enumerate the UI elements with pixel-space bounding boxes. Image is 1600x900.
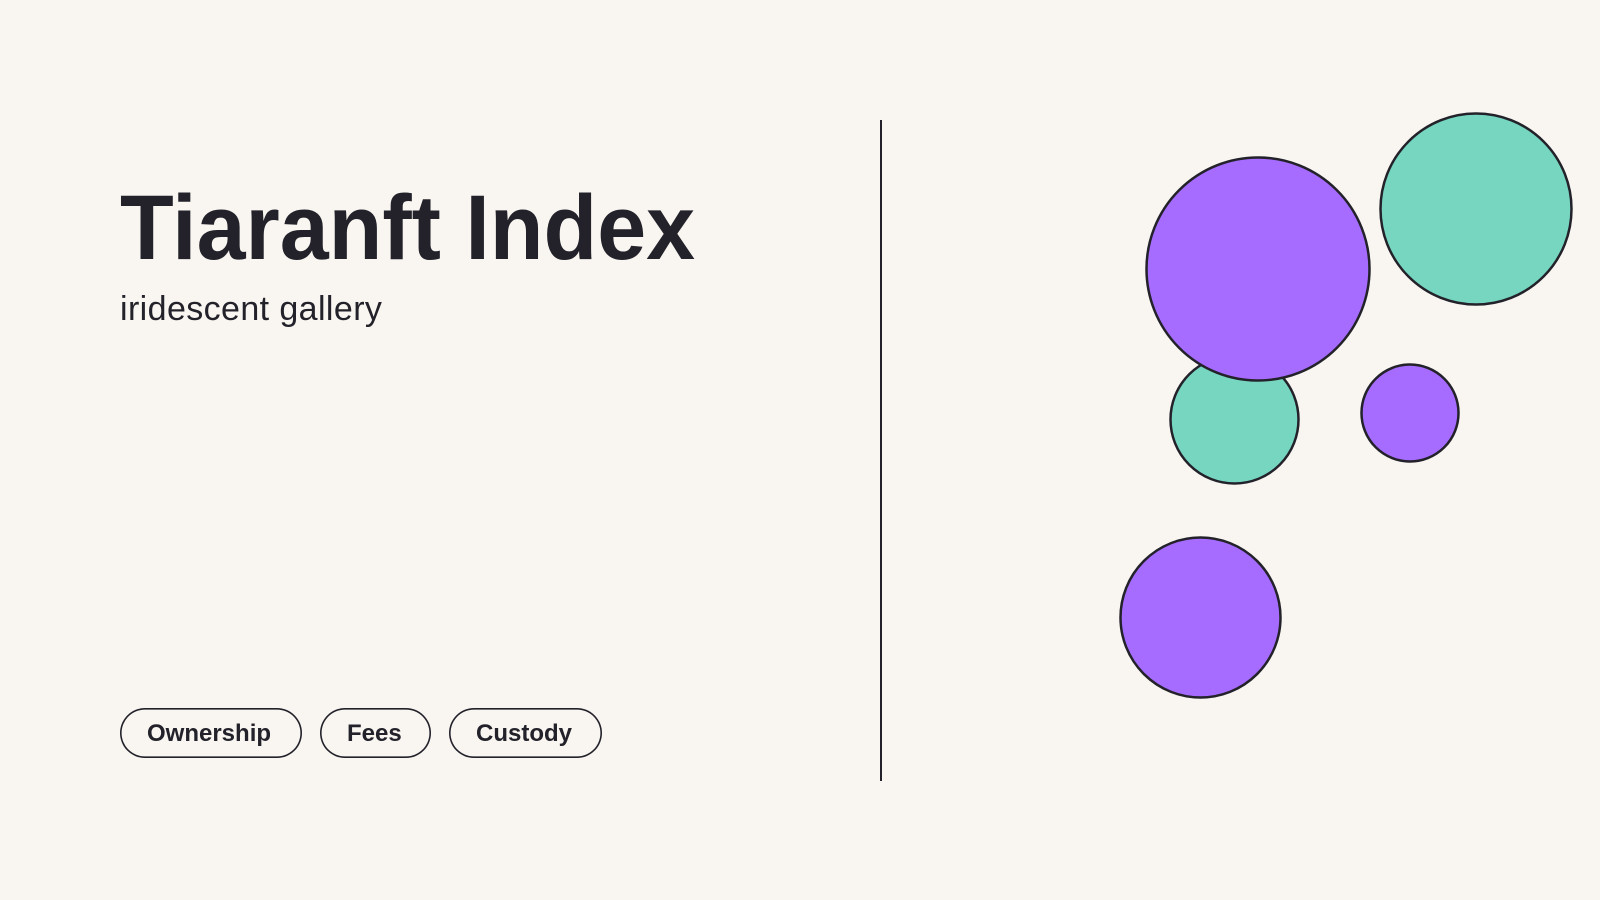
pill: Custody bbox=[449, 708, 602, 758]
tag pills bbox=[120, 708, 602, 758]
pill: Fees: Fees bbox=[347, 720, 402, 747]
pill: Ownership bbox=[120, 708, 302, 758]
pill: Fees bbox=[320, 708, 431, 758]
circle: large purple bbox=[1146, 158, 1370, 380]
pill: Custody: Custody bbox=[476, 720, 572, 747]
vertical divider bbox=[880, 120, 882, 781]
pill: Ownership: Ownership bbox=[147, 720, 271, 747]
circle: teal top right bbox=[1380, 114, 1572, 304]
subtitle: iridescent gallery bbox=[120, 290, 382, 328]
circle: purple bottom bbox=[1120, 538, 1280, 698]
circle: small purple bbox=[1362, 364, 1458, 462]
circle: teal middle bbox=[1170, 356, 1298, 484]
title: Tiaranft Index bbox=[120, 177, 695, 279]
